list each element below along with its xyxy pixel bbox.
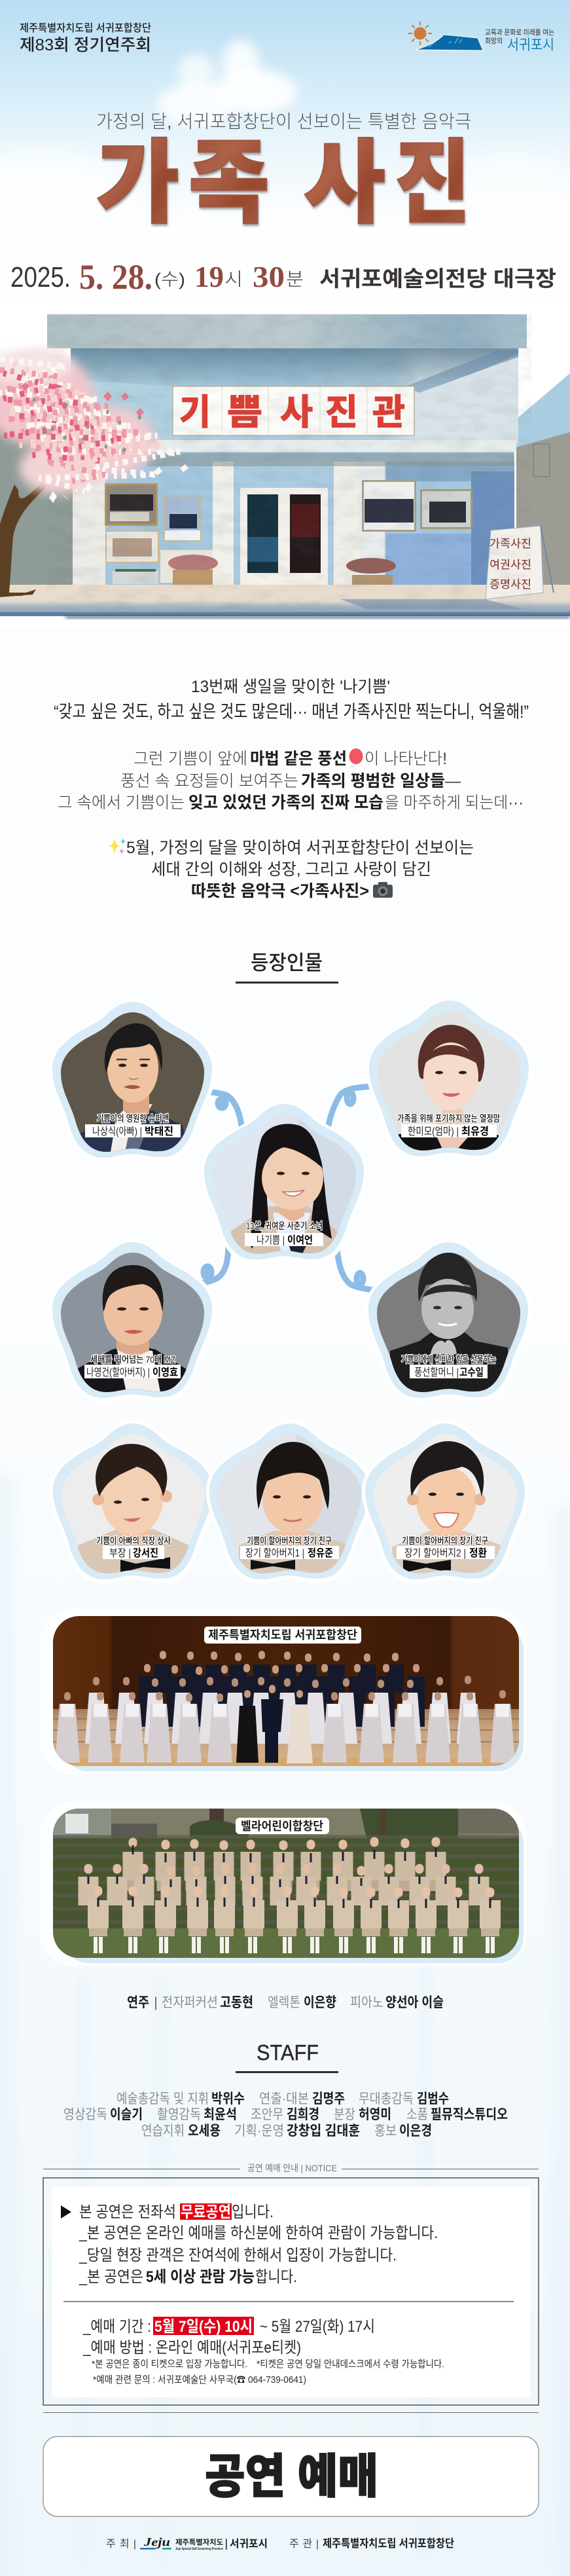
footer: organisers: 서귀포시	[230, 2538, 268, 2550]
roof box	[47, 314, 527, 348]
staff credits: 홍보	[374, 2124, 397, 2139]
panel: boy Jung Hwan: 정환	[469, 1547, 487, 1559]
front row children	[98, 1900, 490, 1928]
framed photo 2	[164, 495, 202, 542]
caption: 13살, 귀여운 사춘기 소녀	[246, 1221, 323, 1231]
intro text: 세대 간의 이해와 성장, 그리고 사랑이 담긴	[151, 860, 431, 879]
icon: sparkles	[109, 837, 126, 855]
arrow: girl to grandfather	[188, 1243, 228, 1285]
framed photo 5	[420, 489, 472, 529]
musicians line: 양선아 이슬	[385, 1995, 444, 2010]
date and venue: 19	[194, 260, 224, 293]
logo: Jeju: Jeju	[143, 2535, 170, 2548]
entrance door	[240, 488, 328, 586]
arrow marker	[61, 2205, 71, 2218]
arrow: father to girl	[204, 1092, 242, 1130]
panel: notice box	[43, 2178, 539, 2405]
panel: notice box: _본 공연은 온라인 예매를 하신분에 한하여 관람이 가능합니다.	[79, 2224, 438, 2242]
panel: Bella children's choir photo	[40, 1801, 527, 1966]
panel: balloon grandmother: 고수일	[459, 1367, 484, 1378]
intro text: 13번째 생일을 맞이한 '나기쁨'	[191, 678, 390, 696]
neighbouring building left	[0, 383, 73, 586]
panel: girl lead: 이여언	[287, 1234, 313, 1246]
caption: 가족을 위해 포기하지 않는 열정맘	[397, 1113, 500, 1124]
title: 가족 사진	[96, 132, 471, 234]
logo: Seogwipo city: 교육과 문화로 미래를 여는	[485, 28, 554, 37]
date and venue: 시	[224, 269, 243, 289]
musicians line: 연주	[127, 1995, 149, 2010]
title: 가족 사진: 가	[96, 132, 179, 234]
panel: boy Jung Yujun: 정유준	[308, 1547, 333, 1559]
panel: girl lead: 나기쁨 |	[257, 1234, 285, 1246]
panel: boy Jung Hwan: 장기 할아버지2 |	[404, 1547, 466, 1559]
framed photo 1	[105, 483, 158, 526]
subtitle: 가정의 달, 서귀포합창단이 선보이는 특별한 음악극	[96, 111, 471, 132]
panel: father: 박태진	[145, 1126, 173, 1137]
sandwich board	[486, 526, 554, 599]
logo: Seogwipo city: 희망의	[485, 37, 503, 45]
sandwich board: 여권사진	[490, 559, 531, 571]
sandwich board: 가족사진	[490, 538, 531, 550]
panel: notice box: *티켓은 공연 당일 안내데스크에서 수령 가능합니다.	[257, 2359, 444, 2370]
logo: Seogwipo city: 서귀포시	[507, 37, 554, 53]
musicians line: 전자퍼커션	[162, 1995, 218, 2010]
musicians line: 고동현	[220, 1995, 253, 2010]
heading: STAFF	[236, 2040, 338, 2073]
panel: boy Jung Yujun	[206, 1420, 373, 1583]
date and venue: 분	[286, 269, 304, 289]
title: 가족 사진: 사	[304, 132, 385, 234]
panel: notice box: ~ 5월 27일(화) 17시	[260, 2318, 375, 2336]
date and venue: 30	[253, 260, 285, 293]
panel: boy Kang Seojin: 강서진	[133, 1547, 158, 1559]
intro text: 잊고 있었던 가족의 진짜 모습	[188, 794, 383, 812]
panel: girl lead	[201, 1101, 368, 1264]
staff credits: 무대총감독	[359, 2091, 414, 2107]
panel: grandfather: 이영효	[152, 1367, 178, 1378]
caption: 기쁨이의 영원한 슈퍼맨	[97, 1113, 169, 1124]
panel: balloon grandmother: 풍선할머니 |	[414, 1367, 459, 1378]
panel: boy Jung Yujun: 장기 할아버지1 |	[245, 1547, 304, 1559]
panel: notice box: _예매 방법 : 온라인 예매(서귀포e티켓)	[82, 2339, 301, 2357]
arrow: mother to girl	[327, 1086, 372, 1133]
middle row children	[88, 1877, 479, 1905]
footer: organisers: Jeju Special Self-Governing Province	[175, 2547, 223, 2551]
intro text: 그런 기쁨이 앞에	[134, 750, 247, 768]
panel: grandfather	[49, 1239, 216, 1402]
notice heading: 공연 예매 안내 | NOTICE	[247, 2163, 337, 2173]
icon: sun and mountain	[409, 22, 483, 50]
staff credits: 필뮤직스튜디오	[431, 2107, 508, 2122]
panel: boy Kang Seojin: 부장 |	[109, 1547, 131, 1559]
button: 공연 예매: 공연 예매	[205, 2451, 378, 2503]
staff credits: 김범수	[417, 2091, 449, 2107]
musicians line: 엘렉톤	[268, 1995, 300, 2010]
panel: notice box: *본 공연은 종이 티켓으로 입장 가능합니다.	[92, 2359, 247, 2370]
heading: STAFF: STAFF	[257, 2040, 319, 2065]
intro text: —	[445, 772, 461, 790]
header: organiser and concert number: 제주특별자치도립 서귀포합창단	[20, 22, 151, 34]
panel: mother: 최유경	[461, 1126, 489, 1137]
logo: Seogwipo city	[409, 22, 554, 53]
logo: Jeju	[140, 2535, 171, 2550]
staff credits: 조안무	[251, 2107, 283, 2122]
framed photo 3	[105, 530, 159, 563]
caption: 기쁨이에게 신비한 힘을 선물하는	[401, 1354, 496, 1365]
caption: 세대를 뛰어넘는 70대 MZ	[90, 1354, 175, 1365]
panel: notice box: 합니다.	[255, 2268, 297, 2286]
icon: camera	[373, 882, 393, 898]
header: organiser and concert number: 제83회 정기연주회	[20, 36, 151, 54]
cherry tree	[0, 350, 188, 597]
ground floor facade	[73, 452, 514, 586]
staff credits: 이슬기	[110, 2107, 143, 2122]
title: 가족 사진: 진	[395, 132, 471, 234]
musicians line	[127, 1995, 444, 2010]
intro text: 을 마주하게 되는데···	[385, 794, 524, 812]
intro text: 가족의 평범한 일상들	[301, 772, 445, 790]
musicians line: |	[154, 1995, 157, 2010]
intro text: 이 나타난다!	[365, 750, 447, 768]
women back row	[85, 1693, 479, 1744]
date and venue: 서귀포예술의전당 대극장	[319, 267, 556, 291]
title: 가족 사진: 족	[188, 132, 270, 234]
staff credits: 촬영감독	[157, 2107, 201, 2122]
button: 공연 예매	[43, 2437, 539, 2516]
heading: 등장인물	[236, 951, 338, 984]
date and venue: 5. 28.	[79, 257, 152, 297]
choir label: 벨라어린이합창단	[241, 1820, 323, 1833]
panel: notice box: 입니다.	[232, 2203, 274, 2221]
intro text: 마법 같은 풍선	[250, 750, 347, 768]
ledge	[156, 440, 516, 452]
panel: notice box: 5세 이상 관람 가능	[146, 2268, 255, 2286]
panel: boy Kang Seojin	[53, 1424, 209, 1579]
date and venue	[10, 257, 556, 297]
highlight: free concert: 무료공연	[181, 2203, 231, 2221]
intro text	[54, 678, 529, 900]
caption: 기쁨이 할아버지의 장기 친구	[402, 1536, 488, 1546]
panel: balloon grandmother	[365, 1239, 532, 1402]
panel: father: 나상식(아빠) |	[92, 1126, 142, 1137]
pavement	[0, 585, 570, 619]
shop sign: 사	[280, 393, 313, 432]
highlight: ticket opening date: 5월 7일(수) 10시	[154, 2318, 253, 2336]
panel: notice box: _본 공연은	[79, 2268, 143, 2286]
staff credits: 박위수	[211, 2091, 245, 2107]
intro text: 5월, 가정의 달을 맞이하여 서귀포합창단이 선보이는	[126, 839, 474, 857]
planters	[113, 555, 396, 589]
footer: organisers: 주 최 |	[106, 2538, 136, 2550]
texture	[47, 314, 531, 609]
staff credits: 연습지휘	[141, 2124, 185, 2139]
panel: grandfather: 나영건(할아버지) |	[86, 1367, 150, 1378]
intro text: 풍선 속 요정들이 보여주는	[120, 772, 298, 790]
panel: Seogwipo choir photo	[40, 1609, 527, 1775]
panel: mother	[366, 997, 533, 1160]
staff credits: 기획·운영	[234, 2124, 284, 2139]
shop sign: 쁨	[227, 393, 262, 432]
heading: 등장인물: 등장인물	[251, 951, 323, 974]
date and venue: (수)	[154, 270, 185, 289]
musicians line: 이은향	[304, 1995, 336, 2010]
soloists and conductor	[236, 1706, 258, 1763]
panel: notice box: 본 공연은 전좌석	[79, 2203, 176, 2221]
shop sign: 관	[372, 393, 405, 432]
shop sign: 기	[179, 393, 211, 432]
staff credits: 연출·대본	[259, 2091, 309, 2107]
caption: 기쁨이 아빠의 직장 상사	[96, 1536, 171, 1546]
icon: balloon	[349, 748, 363, 767]
header: organiser and concert number	[20, 22, 151, 54]
staff credits: 허영미	[359, 2107, 391, 2122]
staff credits: 오세용	[188, 2124, 221, 2139]
staff credits: 이은경	[399, 2124, 432, 2139]
staff credits: 영상감독	[63, 2107, 107, 2122]
shop sign	[173, 386, 414, 435]
women front row	[55, 1704, 515, 1763]
framed photo 4	[362, 480, 416, 532]
panel: mother: 한미모(엄마) |	[408, 1126, 459, 1137]
panel: notice box: *예매 관련 문의 : 서귀포예술단 사무국(☎ 064-739-0641)	[93, 2374, 306, 2385]
neighbouring building right	[516, 373, 570, 586]
intro text: 그 속에서 기쁨이는	[58, 794, 185, 812]
upper facade	[71, 348, 518, 443]
back row children	[133, 1852, 436, 1881]
panel: notice box: _예매 기간 :	[82, 2318, 151, 2336]
footer: organisers: 제주특별자치도	[175, 2537, 223, 2547]
panel: notice box: _당일 현장 관객은 잔여석에 한해서 입장이 가능합니다.	[79, 2247, 397, 2264]
shop sign: 진	[325, 393, 358, 432]
intro text: 따뜻한 음악극 <가족사진>	[191, 882, 369, 900]
staff credits: 분장	[334, 2107, 355, 2122]
staff credits	[63, 2091, 508, 2139]
footer: organisers: 제주특별자치도립 서귀포합창단	[323, 2537, 454, 2550]
choir label: 제주특별자치도립 서귀포합창단	[208, 1628, 357, 1642]
panel: boy Jung Hwan	[362, 1420, 529, 1583]
footer: organisers	[106, 2535, 454, 2551]
sandwich board: 증명사진	[490, 578, 531, 591]
staff credits: 김희경	[287, 2107, 319, 2122]
staff credits: 예술총감독 및 지휘	[116, 2091, 209, 2107]
arrow: girl to balloon grandmother	[337, 1248, 380, 1291]
footer: organisers: 주 관 |	[289, 2538, 319, 2550]
staff credits: 최윤석	[204, 2107, 237, 2122]
staff credits: 김명주	[312, 2091, 345, 2107]
staff credits: 강창입 김대훈	[287, 2124, 360, 2139]
staff credits: 소품	[406, 2107, 428, 2122]
men back rows	[147, 1665, 416, 1727]
musicians line: 피아노	[350, 1995, 383, 2010]
panel: father	[49, 999, 216, 1162]
illustration: photo studio building	[0, 314, 570, 619]
date and venue: 2025.	[10, 261, 71, 293]
caption: 기쁨이 할아버지의 장기 친구	[247, 1536, 332, 1546]
